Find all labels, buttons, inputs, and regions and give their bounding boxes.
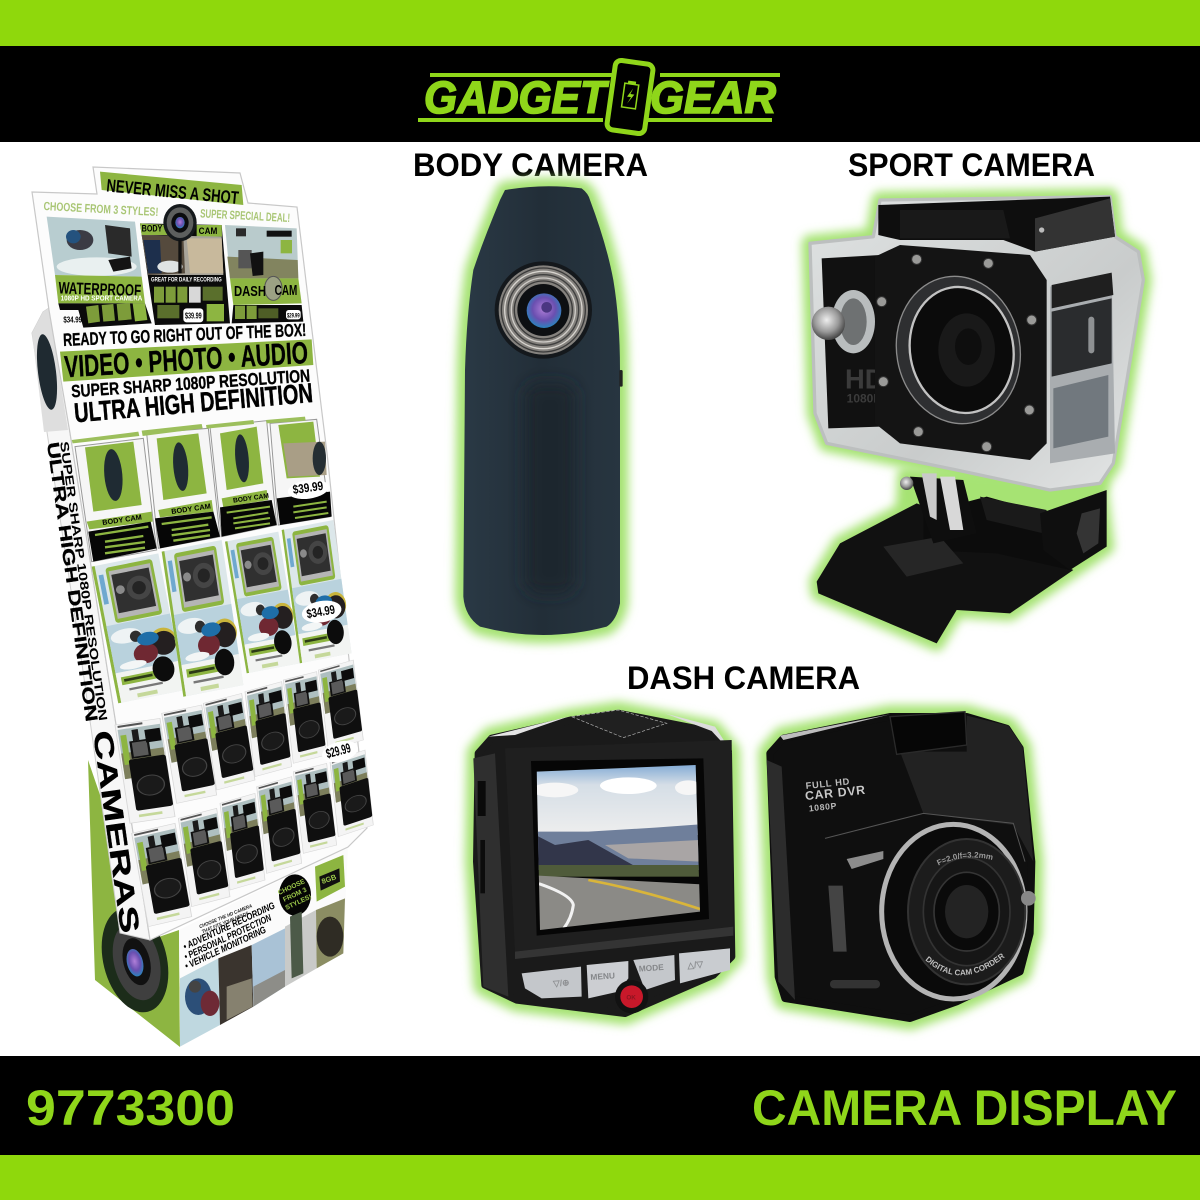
panel: waterproof sport camera: WATERPROOF [58, 278, 141, 300]
display base side (green) [88, 760, 180, 1047]
side panel [32, 308, 150, 940]
banner: video photo audio [60, 336, 313, 384]
heading: sport camera: SPORT CAMERA [848, 147, 1095, 183]
banner: video photo audio: VIDEO • PHOTO • AUDIO [63, 336, 309, 384]
screws [877, 254, 1037, 452]
text: super sharp: SUPER SHARP 1080P RESOLUTION [71, 366, 311, 401]
heading: body camera: BODY CAMERA [413, 147, 648, 183]
base text: CHOOSE THE HD CAMERA [198, 903, 254, 930]
product: sport camera: HD [845, 363, 884, 394]
screen photo [532, 763, 702, 932]
product: dash camera rear with screen: OK [626, 994, 636, 1001]
bottom green band [0, 1155, 1200, 1200]
callout: 8GB card: 8GB [320, 872, 338, 886]
logo: Gadget Gear: GEAR [650, 72, 776, 123]
panel: dash cam [225, 225, 303, 323]
product: dash camera front with lens: 1080P [808, 801, 837, 813]
front plate [875, 245, 1047, 460]
panel: dash cam: $29.99 [287, 312, 300, 319]
top latch [878, 197, 1115, 252]
callout: 8GB card [315, 855, 345, 902]
illustration: retail floor display [32, 167, 373, 1047]
buttons [522, 967, 582, 998]
top black header band [0, 46, 1200, 142]
callout: choose from 3 styles [277, 874, 314, 916]
product: sport camera: 1080P [847, 392, 881, 406]
dash cam cards [115, 660, 373, 927]
lens seal on base side [91, 901, 179, 1019]
side panel shade [32, 308, 68, 432]
header panel artwork [43, 172, 314, 428]
product: dash camera front with lens: DIGITAL CAM CORDER [926, 954, 1005, 976]
side text line 1: SUPER SHARP 1080P RESOLUTION [57, 440, 110, 722]
body cam cards: $39.99 [292, 479, 324, 497]
side camera icon [33, 333, 61, 411]
text: choose from 3 styles: CHOOSE FROM 3 STYLES! [43, 199, 159, 219]
panel: dash cam: DASH [234, 284, 266, 300]
mount [817, 473, 1107, 643]
display title: CAMERA DISPLAY [752, 1080, 1177, 1136]
body cam cards: BODY CAM [171, 502, 211, 516]
banner: never miss a shot [100, 172, 243, 208]
callout: choose from 3 styles: FROM 3 [282, 887, 308, 904]
dash cam cards: $29.99 [324, 740, 352, 761]
base text: • PERSONAL PROTECTION [183, 912, 274, 963]
heading: dash camera: DASH CAMERA [627, 660, 860, 696]
text: ultra high definition: ULTRA HIGH DEFINITION [73, 377, 314, 428]
panel: waterproof sport camera: $34.99 [63, 316, 82, 325]
item number: 9773300 [26, 1080, 235, 1136]
shelf row: dash cams and base artwork [115, 660, 373, 1047]
product: dash camera rear with screen: MENU [590, 970, 615, 982]
text: super special deal: SUPER SPECIAL DEAL! [200, 206, 290, 225]
panel: waterproof sport camera [47, 217, 152, 328]
side window [1050, 273, 1115, 463]
product: dash camera front with lens [752, 698, 1050, 1036]
panel: body cam: CAM [199, 226, 218, 236]
shelf row: body cams and sport cams [72, 417, 353, 703]
callout: choose from 3 styles: STYLES! [284, 894, 313, 912]
sport cam cards: $34.99 [305, 603, 336, 621]
banner: never miss a shot: NEVER MISS A SHOT [106, 175, 240, 208]
side text: cameras: CAMERAS [87, 729, 145, 935]
panel: dash cam: CAM [275, 283, 297, 299]
panel: body cam: GREAT FOR DAILY RECORDING [151, 277, 222, 284]
body cam cards: BODY CAM [102, 513, 142, 527]
product: dash camera rear with screen: ▽/⊕ [552, 977, 570, 989]
panel: body cam: BODY [142, 224, 163, 234]
product: dash camera front with lens: CAR DVR [804, 783, 866, 803]
base text: THAT FITS YOUR NEEDS [201, 911, 250, 935]
logo: Gadget Gear [418, 60, 780, 134]
panel: waterproof sport camera: 1080P HD SPORT CAMERA [61, 296, 142, 303]
product: sport camera [810, 197, 1143, 643]
product: body camera [463, 186, 623, 635]
display front panel [32, 167, 367, 940]
product: dash camera rear with screen: △/▽ [686, 959, 705, 970]
header lens badge [163, 204, 197, 273]
text: ready to go: READY TO GO RIGHT OUT OF THE BOX! [63, 320, 307, 350]
product: dash camera front with lens: FULL HD [805, 776, 850, 791]
product: dash camera front with lens: F=2.0/f=3.2mm [936, 852, 993, 866]
body cam cards: BODY CAM [233, 493, 270, 505]
base photo strip [180, 898, 345, 1047]
panel: body cam: $39.99 [185, 312, 202, 321]
body cam cards [72, 417, 332, 562]
product: dash camera rear with screen [473, 710, 733, 1013]
side text line 2: ULTRA HIGH DEFINITION [43, 441, 101, 723]
callout: choose from 3 styles: CHOOSE [277, 878, 307, 897]
logo: Gadget Gear: GADGET [424, 72, 609, 123]
base text: • VEHICLE MONITORING [183, 925, 268, 972]
base text: • ADVENTURE RECORDING [182, 900, 277, 953]
product: dash camera rear with screen: MODE [638, 962, 665, 974]
side button [832, 290, 875, 353]
display base front [179, 847, 348, 1047]
panel: body cam [140, 223, 230, 325]
bottom black footer band [0, 1056, 1200, 1155]
clear housing [810, 197, 1143, 490]
top green band [0, 0, 1200, 46]
sport cam cards [92, 520, 353, 703]
